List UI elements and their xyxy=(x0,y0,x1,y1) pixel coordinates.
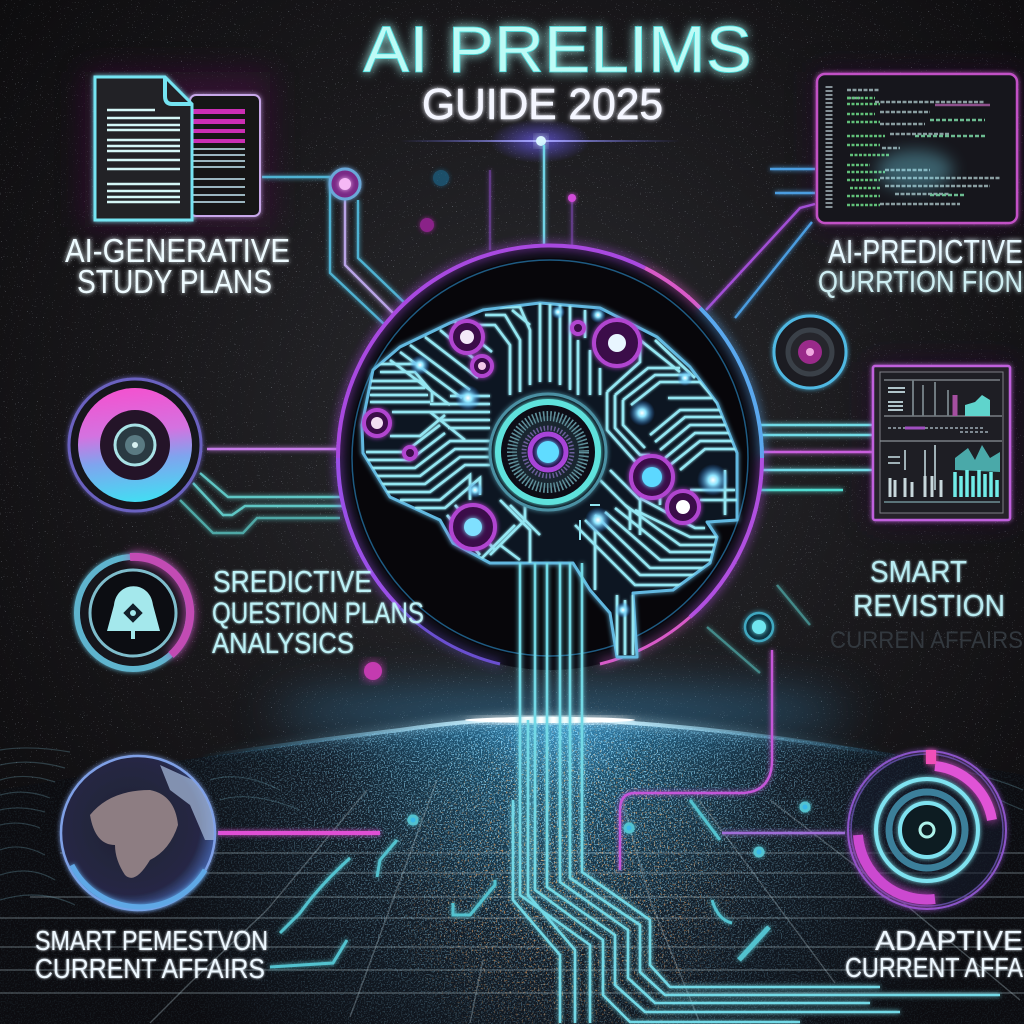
label: smart revision xyxy=(853,554,1005,623)
floor grid xyxy=(0,780,1024,1023)
earth horizon xyxy=(0,690,1024,1024)
star flare xyxy=(400,119,680,163)
brain circuit xyxy=(362,303,737,657)
panel: chart dashboard xyxy=(873,366,1010,520)
label: adaptive: ADAPTIVE xyxy=(875,925,1023,956)
icon: pink disc xyxy=(69,379,201,511)
title: AI PRELIMS xyxy=(363,12,752,86)
wave lines xyxy=(0,748,1023,905)
brain trunk lines xyxy=(513,563,1000,1023)
panel: study plans icon xyxy=(95,77,260,220)
lower chart xyxy=(884,445,1000,502)
label: smart revision: SMART xyxy=(870,554,967,589)
small nodes xyxy=(330,169,773,680)
label: predictive analysis: ANALYSICS xyxy=(212,628,354,660)
icon: target ring right xyxy=(774,316,846,388)
label: predictive xyxy=(818,233,1023,299)
icon: bell ring xyxy=(77,557,190,669)
label: predictive analysis: SREDICTIVE xyxy=(213,564,372,599)
connectors xyxy=(180,145,873,870)
brain core xyxy=(490,394,606,510)
icon halos xyxy=(85,72,1020,522)
label: current affairs left: CURRENT AFFAIRS xyxy=(35,953,265,984)
upper chart xyxy=(880,380,1002,441)
label: study plans xyxy=(65,232,290,300)
label: current affairs left: SMART PEMESTVON xyxy=(35,925,268,956)
label: predictive analysis xyxy=(212,564,424,660)
label: smart revision: REVISTION xyxy=(853,588,1005,623)
panel: globe xyxy=(61,756,218,910)
label: current affairs left xyxy=(35,925,268,984)
central ring xyxy=(338,246,762,664)
panel: code screen xyxy=(817,74,1017,223)
label: study plans: AI-GENERATIVE xyxy=(65,232,290,269)
label: adaptive xyxy=(845,925,1023,983)
label: predictive analysis: QUESTION PLANS xyxy=(212,597,424,630)
label: study plans: STUDY PLANS xyxy=(77,263,272,300)
ground glyph traces xyxy=(270,800,809,967)
brain node lights xyxy=(371,305,729,618)
brain nodes xyxy=(364,320,699,549)
icon: adaptive ring xyxy=(848,750,1006,909)
subtitle: GUIDE 2025 xyxy=(422,80,663,129)
